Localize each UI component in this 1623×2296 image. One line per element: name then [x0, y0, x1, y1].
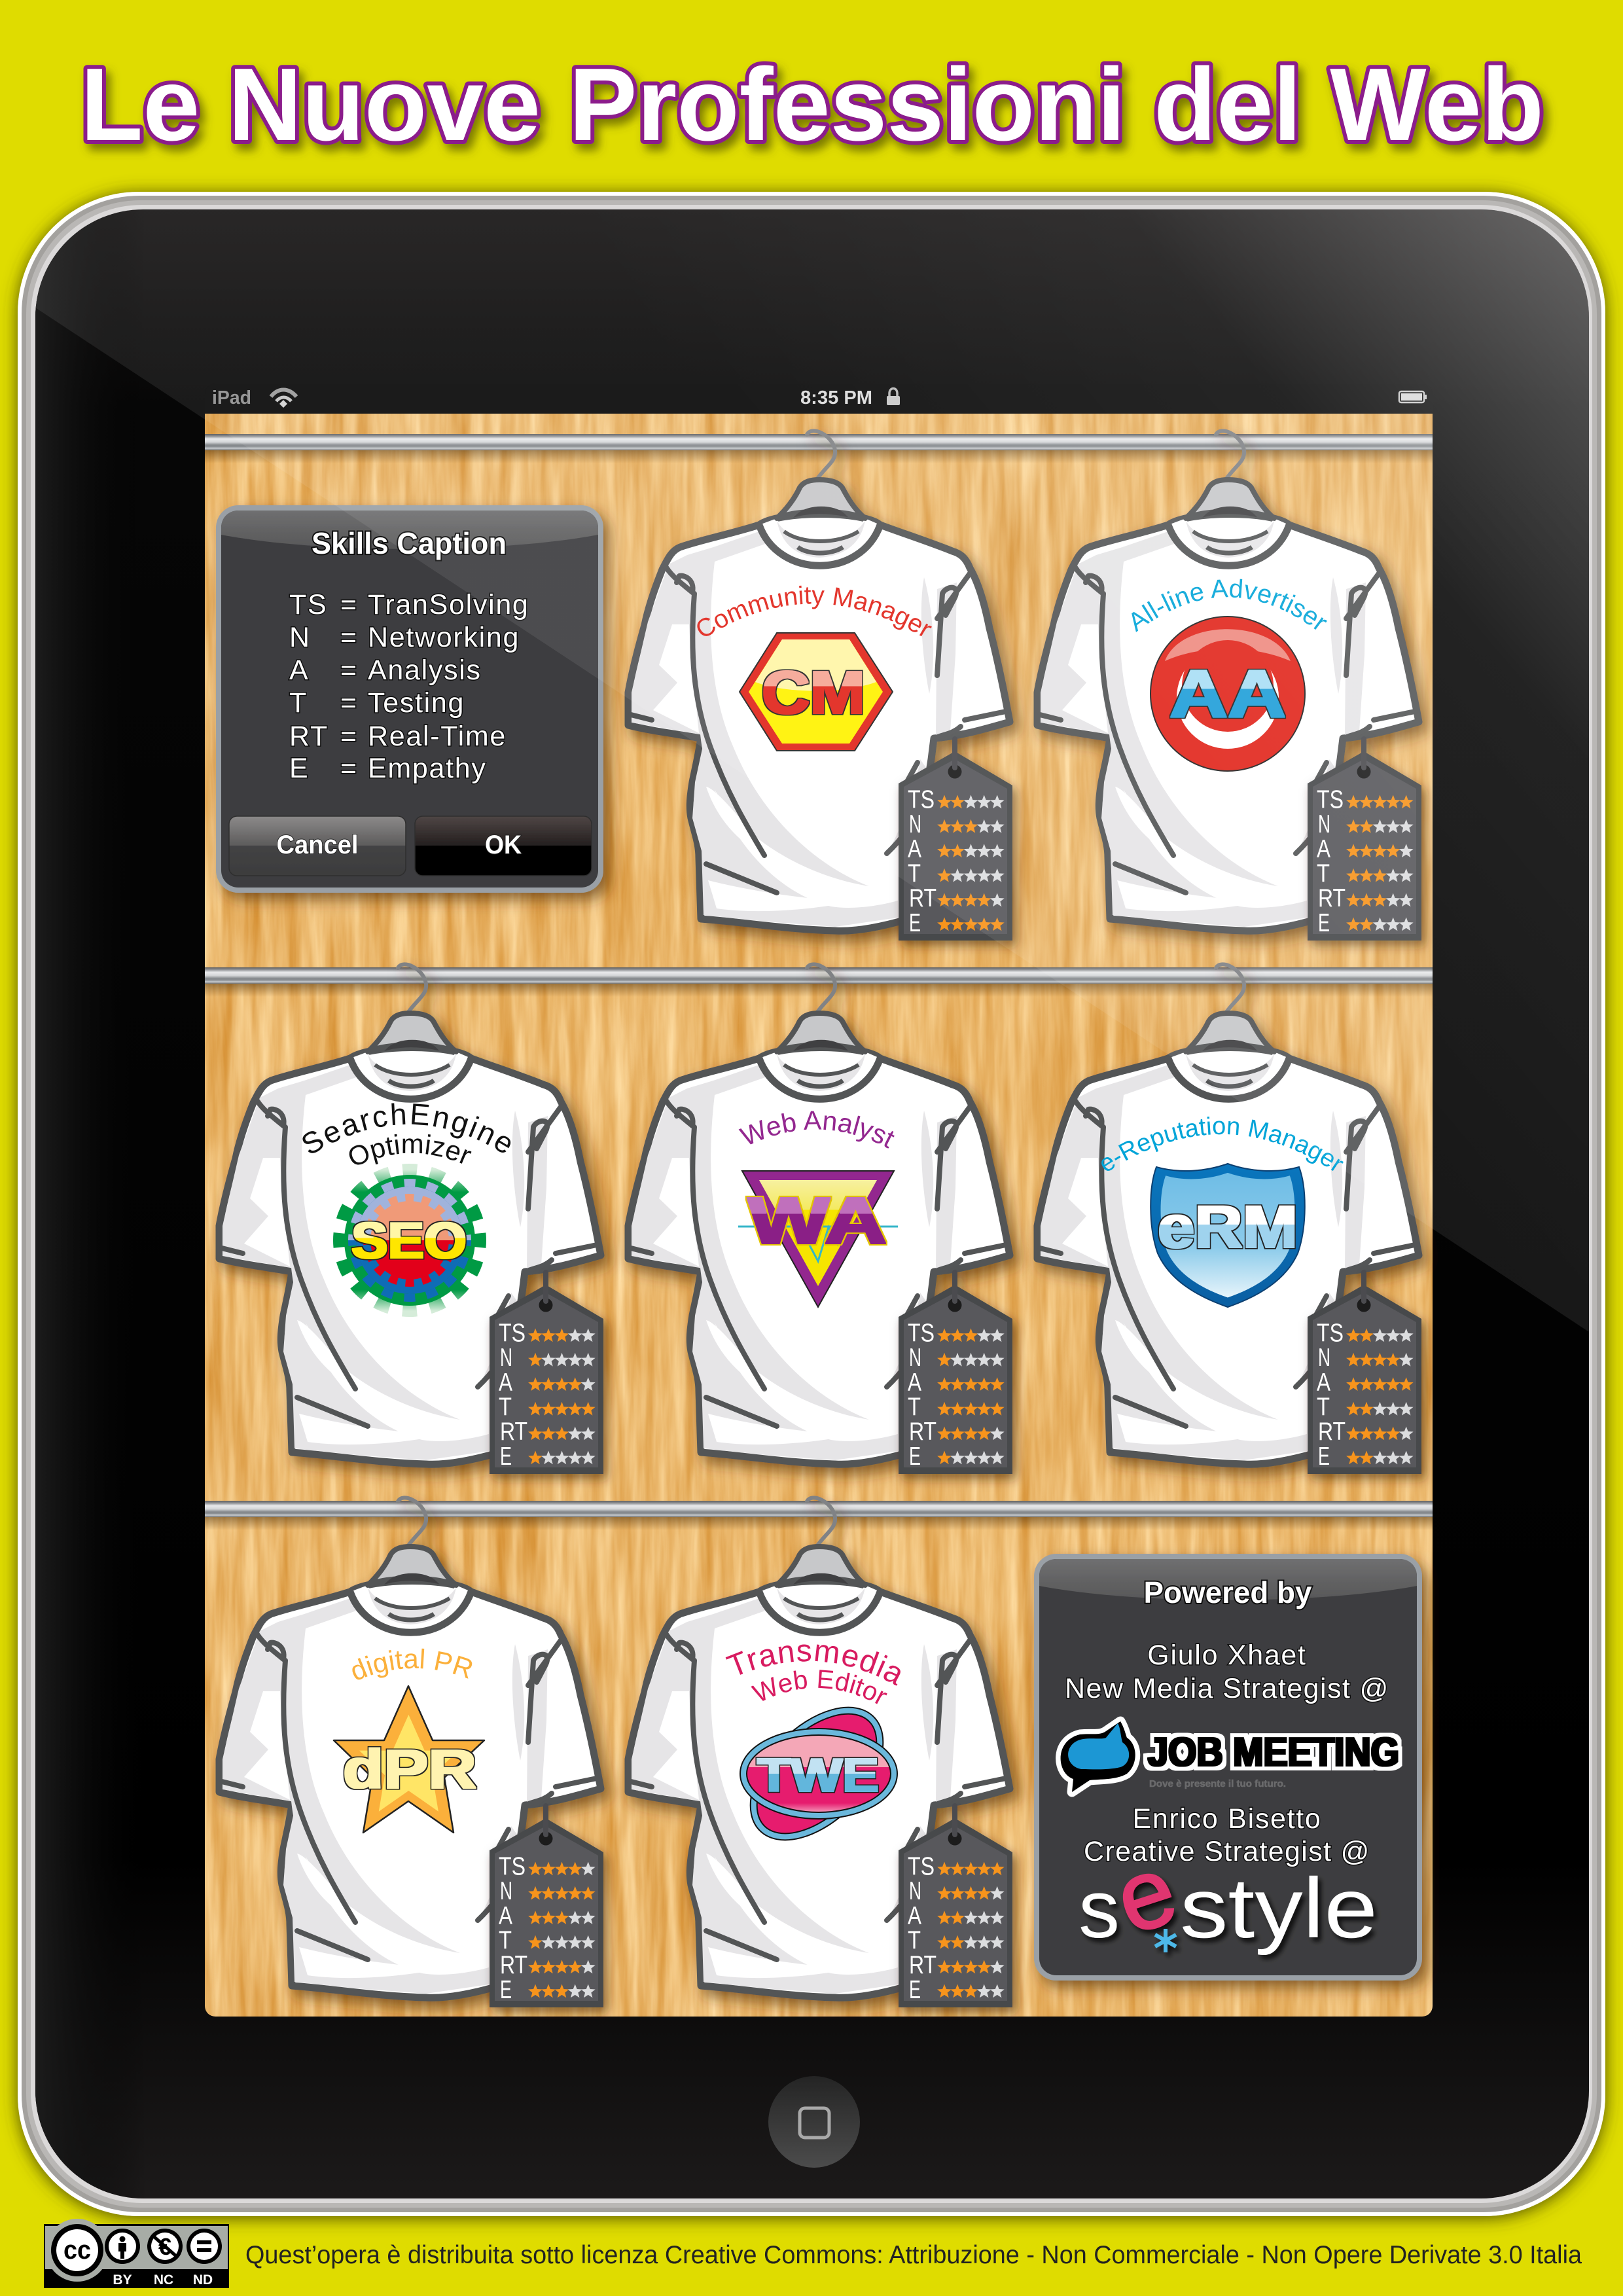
- tag: skills rating: N: [1318, 810, 1330, 838]
- licence labels: BY: [113, 2272, 132, 2287]
- tag: skills rating: TS: [908, 1852, 935, 1881]
- heading: digital pr: digital PR: [346, 1643, 477, 1687]
- badge: creative commons: [44, 2219, 229, 2288]
- icon: blue asterisk: [1155, 1929, 1176, 1952]
- heading: transmedia web editor: Web Editor: [749, 1665, 892, 1712]
- wood background: [205, 414, 1433, 2017]
- logo: sestyle: e: [1103, 1833, 1188, 1955]
- tag: skills rating: [899, 1270, 1012, 1474]
- heading: all-line advertiser: All-line Advertiser: [1132, 579, 1327, 632]
- logo: eRM shield: eRM: [1158, 1194, 1298, 1261]
- tag: skills rating: A: [908, 1902, 921, 1930]
- icon: battery: [1399, 391, 1427, 403]
- licence labels: NC: [154, 2272, 173, 2287]
- logo: CM hexagon: CM: [762, 658, 865, 726]
- logo: AA target: [1150, 617, 1305, 771]
- logo: TWE ellipses: [730, 1687, 903, 1860]
- tag: skills rating: N: [909, 810, 921, 838]
- tag: skills rating: E: [909, 1443, 921, 1471]
- footer licence text: Quest’opera è distribuita sotto licenza Creative Commons: Attribuzione - Non Commerciale - Non Opere Derivate 3.0 Italia: [245, 2241, 1582, 2269]
- tag: skills rating: RT: [500, 1418, 527, 1446]
- skills legend: A: [289, 655, 309, 686]
- status bar: iPad: [212, 387, 251, 408]
- logo: sestyle: style: [1180, 1860, 1378, 1956]
- tag: skills rating: A: [908, 835, 921, 863]
- skills legend: =: [340, 687, 358, 719]
- diagonal glass reflection: [35, 209, 1589, 1332]
- icon: no derivatives: [187, 2229, 222, 2264]
- skills legend: N: [289, 622, 311, 653]
- shirt: e-reputation manager: [1037, 964, 1421, 1474]
- panel: powered by: Giulo Xhaet: [1147, 1640, 1307, 1671]
- tag: skills rating: E: [909, 1976, 921, 2004]
- shirt: web analyst: [628, 964, 1012, 1474]
- button: cancel: Cancel: [276, 831, 359, 859]
- heading: e-reputation manager: e-Reputation Manager: [1094, 1113, 1349, 1178]
- logo: AA target: AA: [1169, 656, 1286, 732]
- tag: skills rating: A: [1317, 835, 1330, 863]
- skills legend: Real-Time: [368, 721, 507, 752]
- tag: skills rating: TS: [1317, 1319, 1344, 1347]
- tag: skills rating: E: [500, 1443, 512, 1471]
- skills legend: =: [340, 721, 358, 752]
- panel: powered by: New Media Strategist @: [1065, 1673, 1389, 1704]
- logo: TWE ellipses: TWE: [757, 1749, 879, 1802]
- tag: skills rating: T: [1317, 860, 1330, 888]
- skills legend: =: [340, 655, 358, 686]
- licence labels: [113, 2272, 213, 2287]
- tag: skills rating: N: [1318, 1344, 1330, 1372]
- logo: CM hexagon: [740, 633, 893, 751]
- logo: WA triangle: [738, 1171, 898, 1307]
- tag: skills rating: RT: [909, 884, 936, 912]
- tag: skills rating: RT: [909, 1418, 936, 1446]
- heading: community manager: Community Manager: [697, 585, 932, 636]
- panel: powered by: Enrico Bisetto: [1132, 1803, 1322, 1835]
- logo: job meeting: [1061, 1721, 1399, 1792]
- heading: search engine optimizer: Optimizer: [349, 1134, 471, 1165]
- icon: cc: cc: [63, 2236, 91, 2265]
- tag: skills rating: T: [499, 1393, 512, 1422]
- tag: skills rating: A: [908, 1369, 921, 1397]
- tag: skills rating: [1308, 1270, 1421, 1474]
- icon: lock: [887, 389, 900, 405]
- shirt: search engine optimizer: [219, 964, 603, 1474]
- rails: [205, 434, 1433, 1530]
- tag: skills rating: A: [499, 1902, 512, 1930]
- logo: dPR star: dPR: [343, 1738, 476, 1800]
- logo: eRM shield: [1150, 1164, 1305, 1307]
- button: ok: OK: [485, 831, 522, 859]
- status bar: 8:35 PM: [800, 387, 872, 408]
- tag: skills rating: RT: [500, 1951, 527, 1979]
- panel: skills caption: [216, 505, 603, 893]
- shirt: all-line advertiser: [1037, 431, 1421, 941]
- skills legend: =: [340, 622, 358, 653]
- screen: [205, 384, 1433, 2017]
- tag: skills rating: T: [1317, 1393, 1330, 1422]
- skills legend: [289, 589, 529, 784]
- skills legend: Analysis: [368, 655, 482, 686]
- tag: skills rating: TS: [499, 1852, 526, 1881]
- tag: skills rating: TS: [908, 785, 935, 814]
- tag: skills rating: [490, 1803, 603, 2007]
- panel: powered by: [1034, 1554, 1422, 1981]
- tag: skills rating: [899, 1803, 1012, 2007]
- skills legend: =: [340, 753, 358, 784]
- logo: WA triangle: WA: [748, 1183, 887, 1258]
- heading: search engine optimizer: SearchEngine: [302, 1103, 510, 1153]
- panel: powered by: Powered by: [1144, 1575, 1312, 1609]
- title: Le Nuove Professioni del Web: [80, 47, 1544, 162]
- tag: skills rating: TS: [908, 1319, 935, 1347]
- logo: SEO gears: SEO: [351, 1211, 467, 1269]
- logo: job meeting: Dove è presente il tuo futuro.: [1149, 1778, 1286, 1789]
- logo: dPR star: [334, 1686, 484, 1833]
- shirt: digital pr: [219, 1498, 603, 2007]
- skills legend: T: [289, 687, 308, 719]
- skills legend: TS: [289, 589, 327, 620]
- tag: skills rating: E: [1318, 909, 1330, 937]
- tag: skills rating: T: [908, 1393, 921, 1422]
- tag: skills rating: A: [499, 1369, 512, 1397]
- tag: skills rating: N: [500, 1877, 512, 1905]
- skills legend: =: [340, 589, 358, 620]
- skills legend: Testing: [368, 687, 465, 719]
- skills legend: TranSolving: [368, 589, 529, 620]
- panel: skills caption: Skills Caption: [312, 526, 507, 560]
- tag: skills rating: TS: [1317, 785, 1344, 814]
- tag: skills rating: RT: [1318, 884, 1346, 912]
- tag: skills rating: N: [500, 1344, 512, 1372]
- tag: skills rating: RT: [909, 1951, 936, 1979]
- icon: attribution: [105, 2229, 140, 2264]
- shirt: transmedia web editor: [628, 1498, 1012, 2007]
- tag: skills rating: N: [909, 1344, 921, 1372]
- button: ok: [415, 816, 592, 876]
- tag: skills rating: N: [909, 1877, 921, 1905]
- logo: job meeting: JOB MEETING: [1148, 1730, 1399, 1775]
- tag: skills rating: A: [1317, 1369, 1330, 1397]
- home button: [768, 2076, 860, 2168]
- logo: sestyle: s: [1079, 1864, 1120, 1955]
- logo: sestyle: [1079, 1833, 1378, 1956]
- skills legend: Networking: [368, 622, 520, 653]
- icon: non commercial: €: [158, 2233, 171, 2260]
- skills legend: E: [289, 753, 309, 784]
- tag: skills rating: [899, 736, 1012, 941]
- tag: skills rating: [1308, 736, 1421, 941]
- icon: cc: [51, 2224, 103, 2276]
- heading: transmedia web editor: Transmedia: [722, 1634, 910, 1693]
- tag: skills rating: T: [499, 1927, 512, 1954]
- tag: skills rating: RT: [1318, 1418, 1346, 1446]
- tag: skills rating: E: [909, 909, 921, 937]
- logo: SEO gears: [339, 1170, 480, 1311]
- shirt: community manager: [628, 431, 1012, 941]
- icon: non commercial: [147, 2229, 183, 2264]
- tag: skills rating: T: [908, 1927, 921, 1954]
- status bar: [213, 387, 1427, 408]
- skills legend: Empathy: [368, 753, 487, 784]
- skills legend: RT: [289, 721, 329, 752]
- tag: skills rating: [490, 1270, 603, 1474]
- tag: skills rating: TS: [499, 1319, 526, 1347]
- heading: web analyst: Web Analyst: [738, 1111, 895, 1149]
- tag: skills rating: T: [908, 860, 921, 888]
- button: cancel: [229, 816, 406, 876]
- tag: skills rating: E: [1318, 1443, 1330, 1471]
- icon: wifi: [271, 390, 296, 408]
- tag: skills rating: E: [500, 1976, 512, 2004]
- licence labels: ND: [193, 2272, 213, 2287]
- panel: powered by: Creative Strategist @: [1084, 1836, 1370, 1867]
